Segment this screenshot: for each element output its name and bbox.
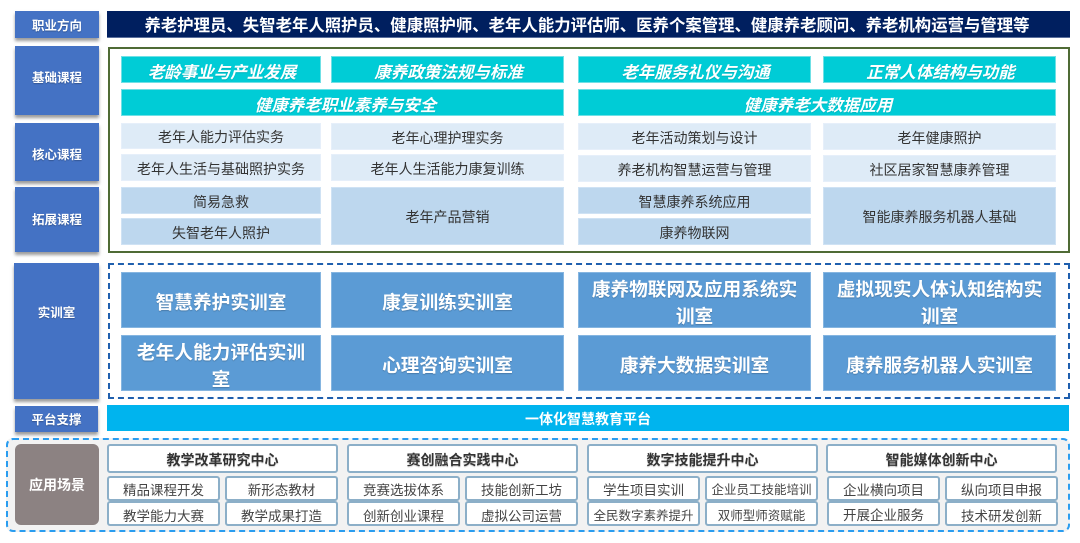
- course: extended 1: 简易急救: [193, 194, 249, 210]
- item: 竞赛选拔体系: [363, 482, 444, 498]
- course: foundation 1: 老龄事业与产业发展: [148, 64, 296, 82]
- center 2 heading: 赛创融合实践中心: [406, 452, 518, 468]
- panel: courses: [108, 47, 1070, 253]
- course: extended 2: 失智老年人照护: [172, 224, 270, 240]
- label: core courses: 核心课程: [32, 148, 82, 162]
- room 4: 虚拟现实人体认知结构实训室: [837, 278, 1042, 326]
- item: [587, 501, 700, 526]
- item: 开展企业服务: [843, 508, 924, 522]
- item: [225, 476, 338, 501]
- center 3 heading: 数字技能提升中心: [646, 452, 758, 468]
- label: training rooms: 实训室: [38, 306, 75, 320]
- item: [107, 501, 220, 526]
- course: core 6: [331, 154, 564, 181]
- room 3: 康养物联网及应用系统实训室: [592, 278, 797, 326]
- item: [827, 501, 940, 526]
- item: [347, 501, 460, 526]
- course: extended 6: 智能康养服务机器人基础: [862, 209, 1016, 225]
- course: foundation 4: 正常人体结构与功能: [866, 64, 1015, 82]
- center 3 heading: [587, 444, 818, 473]
- banner: platform: [107, 405, 1069, 431]
- label: extended courses: [15, 187, 99, 252]
- label: training rooms: [14, 263, 99, 399]
- course: core 3: 老年活动策划与设计: [632, 130, 758, 146]
- item: 双师型师资赋能: [718, 509, 805, 523]
- room 8: 康养服务机器人实训室: [846, 355, 1033, 376]
- label: extended courses: 拓展课程: [32, 212, 82, 226]
- course: extended 5: [578, 218, 811, 245]
- course: core 1: 老年人能力评估实务: [158, 129, 284, 145]
- course: foundation 1: [121, 56, 321, 83]
- course: extended 3: 老年产品营销: [406, 209, 490, 225]
- course: extended 3: [331, 187, 564, 245]
- course: core 6: 老年人生活能力康复训练: [370, 160, 524, 176]
- label: core courses: [15, 123, 99, 181]
- room 6: 心理咨询实训室: [382, 355, 513, 376]
- course: core 5: [121, 154, 321, 181]
- banner: platform: 一体化智慧教育平台: [525, 411, 651, 427]
- room 2: [331, 272, 564, 328]
- course: extended 1: [121, 187, 321, 214]
- item: [107, 476, 220, 501]
- item: 教学成果打造: [241, 508, 322, 524]
- item: [465, 501, 578, 526]
- banner: career list: 养老护理员、失智老年人照护员、健康照护师、老年人能力评估师、医养个案管理、健康养老顾问、养老机构运营与管理等: [144, 17, 1030, 35]
- course: core 7: [578, 155, 811, 182]
- course: core 3: [578, 123, 811, 150]
- course: foundation 2: [331, 56, 564, 83]
- item: 技术研发创新: [961, 508, 1042, 524]
- item: 新形态教材: [248, 482, 315, 498]
- item: [827, 476, 940, 501]
- item: 精品课程开发: [123, 482, 204, 498]
- label: platform support: [15, 406, 98, 432]
- item: 学生项目实训: [603, 482, 684, 498]
- label: career direction: 职业方向: [32, 19, 82, 33]
- item: [225, 501, 338, 526]
- item: 创新创业课程: [363, 508, 444, 524]
- room 2: 康复训练实训室: [382, 292, 513, 313]
- item: [347, 476, 460, 501]
- item: 技能创新工坊: [481, 482, 562, 498]
- course: core 7: 养老机构智慧运营与管理: [618, 162, 772, 178]
- item: 纵向项目申报: [961, 482, 1042, 498]
- course: foundation 3: 老年服务礼仪与沟通: [621, 64, 770, 82]
- course: foundation 5: 健康养老职业素养与安全: [255, 96, 436, 114]
- panel: training rooms: [108, 263, 1070, 399]
- course: extended 4: 智慧康养系统应用: [638, 194, 750, 210]
- course: core 8: 社区居家智慧康养管理: [870, 162, 1010, 178]
- course: core 2: 老年心理护理实务: [392, 130, 504, 146]
- item: [945, 501, 1058, 526]
- course: foundation 4: [823, 56, 1056, 83]
- room 6: [331, 335, 564, 391]
- item: 企业员工技能培训: [711, 483, 812, 497]
- label: career direction: [15, 11, 99, 38]
- course: foundation 6: [578, 89, 1056, 116]
- course: extended 6: [823, 187, 1056, 245]
- room 7: [578, 335, 811, 391]
- panel: application scenarios: [6, 438, 1070, 532]
- course: foundation 2: 康养政策法规与标准: [374, 64, 523, 82]
- course: core 2: [331, 123, 564, 150]
- room 1: 智慧养护实训室: [156, 292, 286, 313]
- label: foundation courses: 基础课程: [32, 71, 82, 85]
- label: foundation courses: [15, 46, 99, 115]
- course: foundation 6: 健康养老大数据应用: [744, 96, 892, 114]
- banner: career list: [107, 11, 1070, 38]
- course: foundation 5: [121, 89, 564, 116]
- label: application scenarios: 应用场景: [29, 476, 85, 492]
- item: 虚拟公司运营: [481, 508, 562, 524]
- course: core 5: 老年人生活与基础照护实务: [137, 160, 305, 176]
- course: core 4: 老年健康照护: [898, 130, 982, 146]
- label: application scenarios: [15, 444, 99, 525]
- center 2 heading: [347, 444, 578, 473]
- course: extended 4: [578, 187, 811, 214]
- item: [705, 476, 818, 501]
- center 1 heading: [107, 444, 338, 473]
- item: [465, 476, 578, 501]
- course: core 8: [823, 155, 1056, 182]
- item: 企业横向项目: [843, 482, 924, 498]
- course: foundation 3: [578, 56, 811, 83]
- course: extended 5: 康养物联网: [660, 224, 730, 240]
- course: core 4: [823, 123, 1056, 150]
- item: 教学能力大赛: [123, 508, 204, 524]
- item: [705, 501, 818, 526]
- item: [945, 476, 1058, 501]
- course: core 1: [121, 123, 321, 149]
- item: [587, 476, 700, 501]
- label: platform support: 平台支撑: [31, 413, 82, 427]
- item: 全民数字素养提升: [593, 509, 694, 523]
- center 1 heading: 教学改革研究中心: [166, 452, 278, 468]
- room 5: 老年人能力评估实训室: [137, 342, 305, 390]
- room 1: [121, 272, 321, 328]
- course: extended 2: [121, 218, 321, 245]
- room 8: [823, 335, 1056, 391]
- center 4 heading: [826, 444, 1057, 473]
- center 4 heading: 智能媒体创新中心: [886, 452, 998, 468]
- room 7: 康养大数据实训室: [620, 355, 769, 376]
